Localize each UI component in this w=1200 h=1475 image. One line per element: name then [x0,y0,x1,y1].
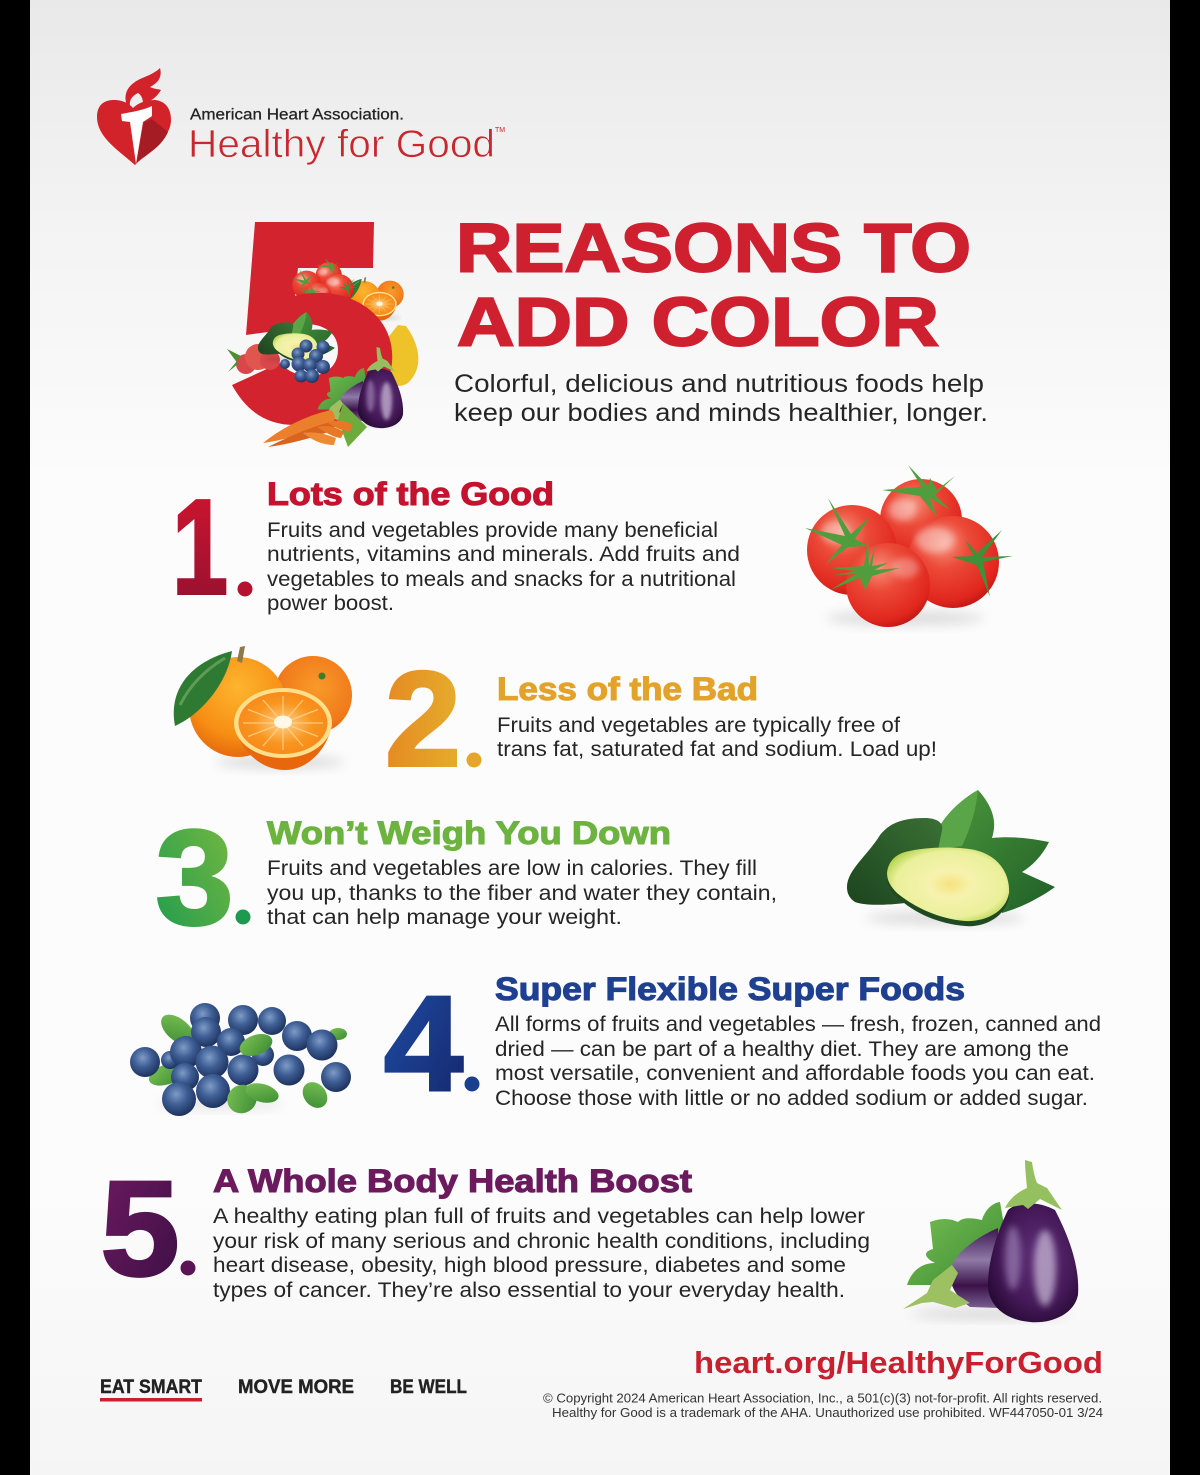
title: ADD COLOR [457,284,939,360]
illustration: avocado [847,790,1055,926]
footer: tagline nav: EAT SMART [100,1377,202,1398]
title [456,210,971,360]
numeral 5: 5 [100,1153,180,1304]
numeral 5: bowl [232,293,392,425]
body text: your risk of many serious and chronic health conditions, including [213,1229,870,1253]
carrots [263,403,367,447]
logo: American Heart Association Healthy for Good [97,68,505,166]
section 1: Lots of the Good [172,472,740,622]
numeral 5: bar and stem [246,222,374,335]
footer: tagline nav: BE WELL [390,1377,467,1398]
body text [267,856,777,929]
footer: website: heart.org/HealthyForGood [694,1345,1103,1380]
text: trademark: TM [495,127,505,134]
text: American Heart Association: American Heart Association. [190,106,404,124]
icon: heart and torch [97,68,171,165]
footer: copyright: © Copyright 2024 American Heart Association, Inc., a 501(c)(3) not-for-profit. All rights reserved. [543,1392,1102,1406]
intro text: keep our bodies and minds healthier, longer. [454,399,988,427]
numeral 3: 3 [156,802,234,953]
body text: trans fat, saturated fat and sodium. Load up! [497,737,937,761]
body text: Fruits and vegetables are low in calories. They fill [267,856,757,880]
heading: Less of the Bad [497,671,758,707]
footer: tagline nav: MOVE MORE [238,1377,354,1398]
body text [495,1012,1101,1110]
illustration: blueberries [130,1003,351,1119]
body text: Choose those with little or no added sodium or added sugar. [495,1086,1088,1110]
heading: Lots of the Good [267,476,554,512]
section 5: A Whole Body Health Boost [100,1153,870,1304]
body text: that can help manage your weight. [267,905,622,929]
heading: Super Flexible Super Foods [495,971,965,1007]
body text [497,713,937,761]
body text: nutrients, vitamins and minerals. Add fruits and [267,542,740,566]
strawberries [227,344,280,374]
intro text [454,370,988,427]
illustration: tomatoes [805,465,1013,627]
intro text: Colorful, delicious and nutritious foods help [454,370,984,398]
numeral 2: 2 [385,644,461,794]
section 4: Super Flexible Super Foods [384,968,1101,1119]
body text [267,518,740,615]
heading: A Whole Body Health Boost [213,1163,692,1199]
body text: A healthy eating plan full of fruits and vegetables can help lower [213,1204,865,1228]
body text [213,1204,870,1302]
body text: most versatile, convenient and affordable foods you can eat. [495,1061,1095,1085]
numeral 1: 1 [172,472,228,622]
body text: you up, thanks to the fiber and water they contain, [267,881,777,905]
text: Healthy for Good: Healthy for Good [188,123,495,166]
body text: power boost. [267,591,394,615]
illustration: oranges [174,646,352,770]
banana [386,325,418,386]
body text: Fruits and vegetables provide many beneficial [267,518,718,542]
footer: copyright: Healthy for Good is a trademark of the AHA. Unauthorized use prohibited. WF447050-01 3/24 [552,1406,1103,1420]
title: REASONS TO [456,210,971,286]
leaves [907,1202,1004,1285]
illustration: big number 5 with fruits and vegetables [227,222,418,447]
footer: tagline nav [100,1377,467,1402]
heading: Won’t Weigh You Down [267,815,671,851]
body text: All forms of fruits and vegetables — fresh, frozen, canned and [495,1012,1101,1036]
body text: heart disease, obesity, high blood pressure, diabetes and some [213,1253,846,1277]
leaves [146,1009,347,1113]
body text: dried — can be part of a healthy diet. They are among the [495,1037,1069,1061]
body text: Fruits and vegetables are typically free of [497,713,900,737]
body text: types of cancer. They’re also essential to your everyday health. [213,1278,845,1302]
section 3: Won't Weigh You Down [156,802,777,953]
illustration: eggplants [903,1160,1078,1322]
section 2: Less of the Bad [385,644,937,794]
footer: copyright [543,1392,1103,1420]
numeral 4: 4 [384,968,463,1119]
blueberries in the counter [280,340,330,383]
body text: vegetables to meals and snacks for a nutritional [267,567,736,591]
underline [100,1398,202,1402]
